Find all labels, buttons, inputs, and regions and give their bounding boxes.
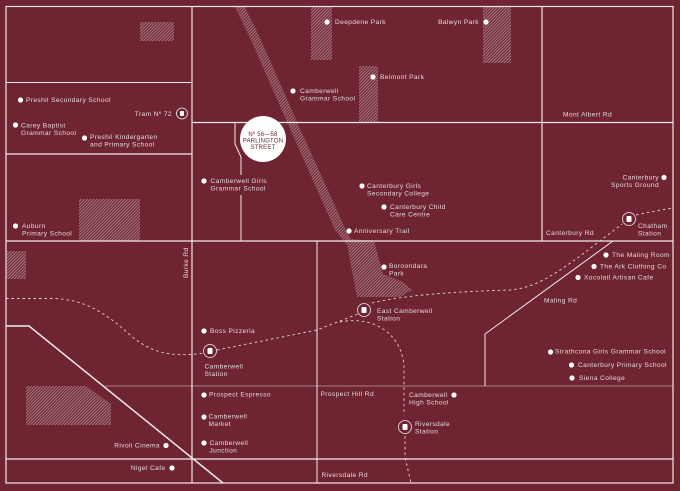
labels: top and left: Deepdene Park (335, 19, 386, 26)
labels: top and left: Preshil Kindergarten (90, 134, 158, 141)
labels: right: Xocolatl Artisan Cafe (584, 274, 653, 282)
labels: lower left: Boss Pizzeria (210, 328, 255, 335)
labels: top and left: Tram Nº 72 (135, 111, 172, 118)
labels: centre: Riversdale (415, 421, 450, 428)
labels: top and left: Grammar School (300, 96, 355, 102)
labels: centre: Park (389, 270, 404, 278)
labels: top and left: Belmont Park (380, 74, 425, 81)
labels: centre: Prospect Hill Rd (320, 391, 374, 398)
labels: right: Canterbury Rd (546, 230, 594, 237)
labels: right: Sports Ground (611, 182, 659, 189)
labels: lower left: Prospect Espresso (209, 392, 271, 398)
labels: top and left: Camberwell Girls (210, 178, 267, 185)
labels: lower left (114, 247, 271, 472)
marker: address (240, 116, 286, 162)
parks: hatched areas (7, 7, 511, 425)
labels: top and left: Primary School (22, 230, 72, 238)
labels: lower left: Junction (210, 448, 237, 454)
labels: top and left: Grammar School (210, 186, 266, 192)
labels: right: The Ark Clothing Co (600, 264, 666, 270)
labels: centre (320, 183, 450, 479)
labels: top and left: Auburn (22, 223, 46, 230)
station icons (176, 108, 636, 434)
labels: centre: Canterbury Girls (367, 183, 422, 190)
labels: top and left: Carey Baptist (21, 122, 66, 130)
labels: right: Chatham (638, 223, 668, 230)
labels: lower left: Rivoli Cinema (114, 442, 160, 450)
labels: top and left: Grammar School (21, 130, 76, 137)
labels: lower left: Market (208, 421, 231, 428)
labels: centre: Camberwell (409, 392, 448, 399)
labels: right: Station (638, 230, 661, 238)
labels: right: Canterbury Primary School (578, 362, 667, 369)
rail lines (6, 208, 673, 483)
labels: right: Canterbury (622, 174, 659, 182)
labels: centre: Care Centre (390, 212, 430, 218)
labels: centre: Anniversary Trail (354, 228, 410, 235)
labels: lower left: Camberwell (210, 440, 248, 447)
labels: centre: Secondary College (367, 190, 429, 198)
labels: lower left: Nigel Cafe (131, 465, 166, 472)
labels: top and left: Preshil Secondary School (26, 97, 111, 104)
labels: centre: Station (377, 316, 400, 322)
labels: top and left: and Primary School (90, 142, 155, 148)
marker: address: PARLINGTON (243, 138, 283, 144)
labels: lower left: Camberwell (208, 414, 247, 420)
labels: right: Mont Albert Rd (563, 112, 612, 118)
labels: centre: Riversdale Rd (322, 472, 368, 479)
labels: lower left: Station (204, 371, 228, 378)
labels: centre: Boroondara (389, 263, 427, 270)
labels: right: Strathcona Girls Grammar School (555, 348, 666, 356)
labels: centre: High School (409, 400, 449, 406)
labels: top and left: Balwyn Park (438, 19, 479, 26)
labels: right: Maling Rd (544, 298, 577, 304)
labels: centre: Canterbury Child (390, 204, 446, 211)
labels: centre: Station (415, 428, 438, 436)
labels: lower left: Burke Rd (183, 247, 190, 278)
marker: address: Nº 56—58 (248, 131, 278, 138)
labels: right (544, 112, 670, 382)
labels: centre: East Camberwell (377, 308, 433, 315)
labels: right: Siena College (579, 375, 625, 382)
marker: address: STREET (251, 145, 276, 151)
labels: lower left: Camberwell (204, 364, 243, 370)
labels: right: The Maling Room (612, 252, 670, 259)
labels: top and left (21, 19, 479, 238)
labels: top and left: Camberwell (300, 88, 339, 95)
